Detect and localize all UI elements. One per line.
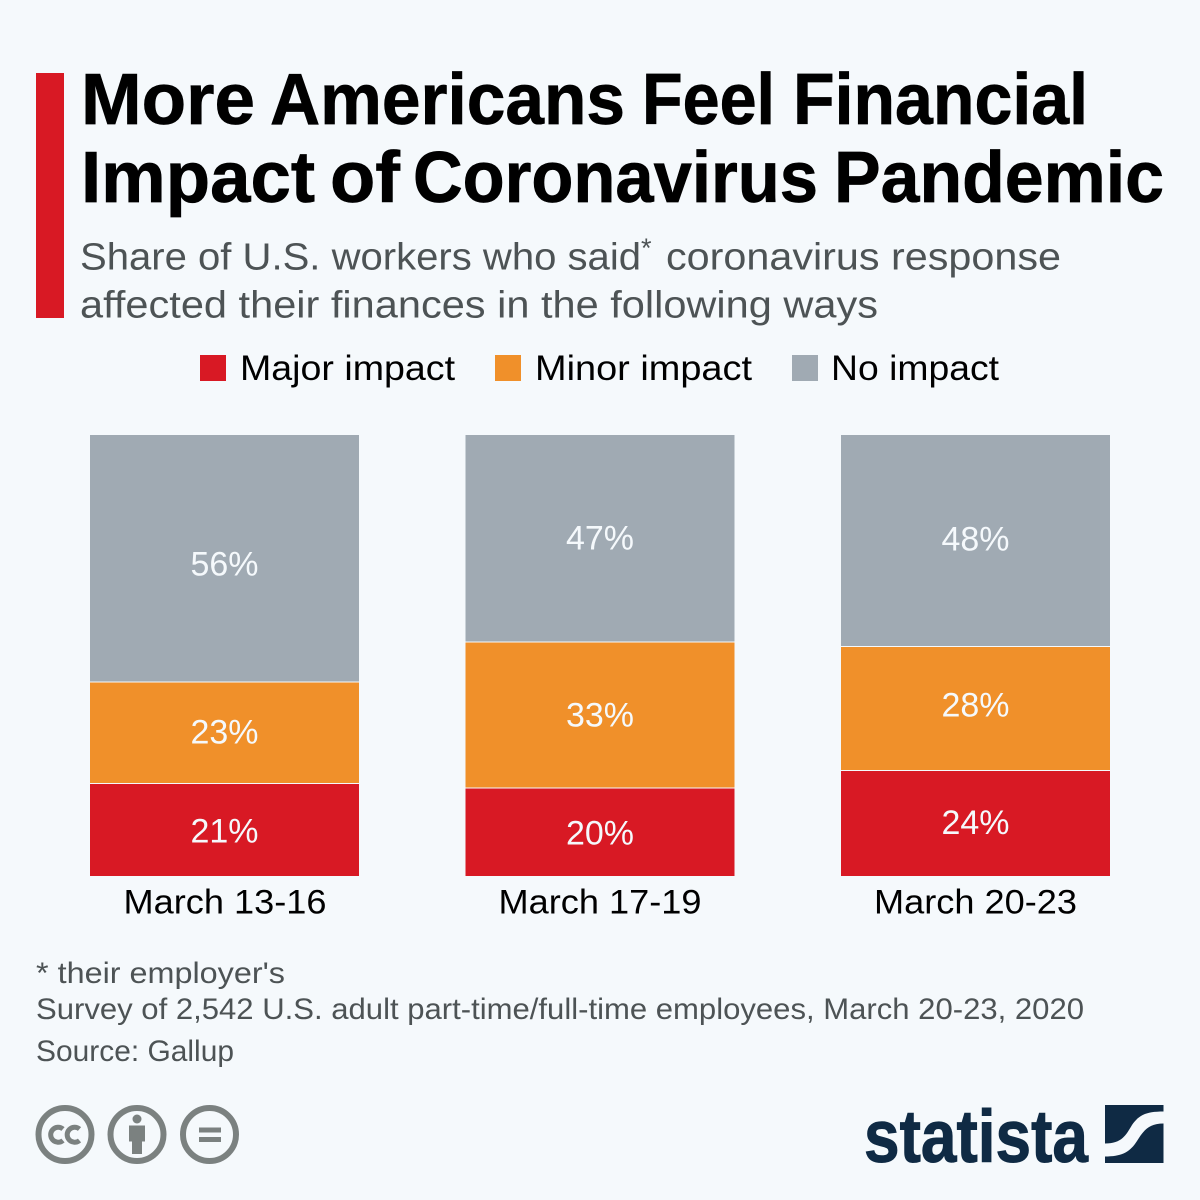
icon: creative commons xyxy=(38,1108,92,1161)
legend: major impact: Major impact xyxy=(240,349,455,388)
title xyxy=(81,60,1164,218)
legend: no impact: No impact xyxy=(831,349,999,388)
bar: March 17-19: March 17-19 xyxy=(498,884,702,922)
stacked bar chart xyxy=(90,435,1110,922)
title: of xyxy=(330,138,401,218)
bar: March 20-23 xyxy=(841,435,1110,922)
bar: March 20-23: 28% xyxy=(942,686,1010,724)
bar: March 13-16: 21% xyxy=(190,812,258,850)
subtitle: * xyxy=(641,233,652,263)
statista logo xyxy=(864,1095,1164,1178)
legend xyxy=(200,349,999,388)
subtitle xyxy=(80,233,1061,326)
footnotes: Source: Gallup xyxy=(36,1035,234,1068)
logo wordmark: statista xyxy=(864,1095,1089,1178)
title: Financial xyxy=(793,60,1088,140)
footnotes: Survey of 2,542 U.S. adult part-time/full-time employees, March 20-23, 2020 xyxy=(36,993,1084,1026)
bar: March 17-19: 20% xyxy=(566,814,634,852)
icon: no derivatives xyxy=(183,1108,236,1161)
bar: March 13-16: March 13-16 xyxy=(124,884,326,922)
title: Feel xyxy=(642,60,775,140)
title: Pandemic xyxy=(834,138,1164,218)
accent bar xyxy=(36,73,64,318)
bar: March 17-19 xyxy=(466,435,734,922)
title: Americans xyxy=(270,60,625,140)
license icons xyxy=(38,1108,236,1161)
bar: March 17-19: 33% xyxy=(566,696,634,734)
legend: minor impact: Minor impact xyxy=(535,349,752,388)
subtitle: affected their finances in the following ways xyxy=(80,284,878,326)
bar: March 17-19: 47% xyxy=(566,520,634,558)
icon: attribution xyxy=(110,1108,164,1161)
logo mark xyxy=(1105,1105,1164,1163)
title: Impact xyxy=(81,138,315,218)
footnotes: * their employer's xyxy=(36,957,285,990)
subtitle: Share of U.S. workers who said xyxy=(80,236,641,278)
title: More xyxy=(81,60,255,140)
bar: March 13-16 xyxy=(90,435,359,922)
footnotes xyxy=(36,957,1084,1068)
bar: March 20-23: March 20-23 xyxy=(874,884,1077,922)
bar: March 20-23: 24% xyxy=(942,804,1010,842)
bar: March 13-16: 56% xyxy=(190,546,258,584)
bar: March 20-23: 48% xyxy=(942,520,1010,558)
subtitle: coronavirus response xyxy=(666,236,1061,278)
bar: March 13-16: 23% xyxy=(190,714,258,752)
title: Coronavirus xyxy=(413,138,818,218)
